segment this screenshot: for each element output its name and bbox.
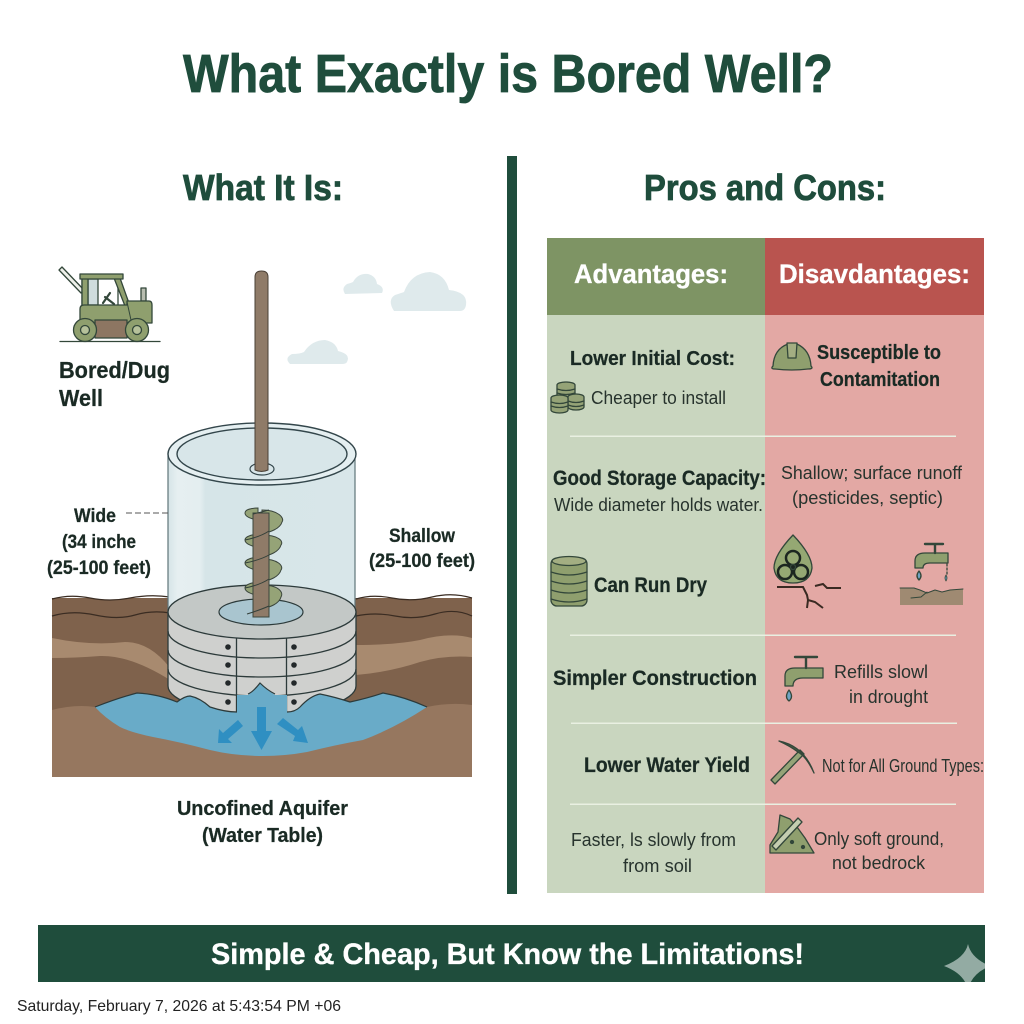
row 6 disadvantage: Only soft ground, bbox=[814, 829, 944, 849]
icon: tractor bbox=[59, 267, 160, 342]
label: bored/dug well: Well bbox=[59, 385, 103, 411]
icon: hard hat bbox=[772, 343, 812, 370]
row 5 advantage: Lower Water Yield bbox=[584, 754, 750, 777]
water outline bbox=[95, 683, 427, 712]
label: unconfined aquifer: Uncofined Aquifer bbox=[177, 798, 348, 820]
label: unconfined aquifer: (Water Table) bbox=[202, 825, 323, 847]
right heading: Pros and Cons: bbox=[644, 167, 886, 208]
wide dashed leader bbox=[126, 512, 168, 514]
row 3 advantage: Can Run Dry bbox=[594, 574, 707, 597]
timestamp: Saturday, February 7, 2026 at 5:43:54 PM +06 bbox=[17, 998, 341, 1015]
auger bbox=[245, 508, 283, 617]
footer banner: Simple & Cheap, But Know the Limitations! bbox=[211, 938, 804, 971]
clouds bbox=[287, 272, 466, 364]
title: What Exactly is Bored Well? bbox=[183, 44, 833, 104]
disadvantages header bbox=[765, 238, 984, 315]
flow arrows bbox=[218, 707, 308, 750]
row 2 disadvantage bbox=[781, 463, 963, 508]
label: wide: (25-100 feet) bbox=[47, 558, 151, 579]
soil cross-section bbox=[52, 585, 472, 777]
label: bored/dug well: Bored/Dug bbox=[59, 357, 170, 383]
row 1 disadvantage bbox=[772, 342, 941, 391]
label: bored/dug well bbox=[59, 357, 170, 411]
advantages column background bbox=[547, 315, 765, 893]
footer banner bbox=[38, 925, 985, 982]
icon: coins bbox=[551, 382, 584, 413]
label: shallow bbox=[369, 526, 475, 572]
row 3 advantage bbox=[551, 556, 707, 606]
row 2 advantage bbox=[553, 467, 766, 515]
row 2 disadvantage: (pesticides, septic) bbox=[792, 488, 943, 508]
row 2 disadvantage: Shallow; surface runoff bbox=[781, 463, 963, 483]
row 1 advantage bbox=[551, 348, 735, 413]
row 1 advantage: Cheaper to install bbox=[591, 388, 726, 408]
panel: pros and cons table bbox=[547, 238, 984, 893]
row 1 disadvantage: Contamitation bbox=[820, 369, 940, 391]
row 4 advantage: Simpler Construction bbox=[553, 667, 757, 690]
row 4 disadvantage: in drought bbox=[849, 687, 928, 707]
label: wide: Wide bbox=[74, 506, 116, 527]
aquifer water bbox=[95, 683, 427, 756]
label: wide bbox=[47, 506, 151, 579]
label: shallow: (25-100 feet) bbox=[369, 551, 475, 572]
icon: cracked ground bbox=[777, 584, 841, 608]
icon: rock and drill bbox=[770, 815, 814, 853]
row 4 disadvantage bbox=[785, 657, 928, 707]
row 6 advantage: Faster, ls slowly from bbox=[571, 830, 736, 850]
icon: pickaxe bbox=[771, 741, 814, 784]
row 6 advantage bbox=[571, 830, 736, 876]
row 1 advantage: Lower Initial Cost: bbox=[570, 348, 735, 370]
advantages header: Advantages: bbox=[574, 259, 728, 289]
advantages header bbox=[547, 238, 765, 315]
row 3 icons: biohazard and cracked ground bbox=[774, 535, 963, 608]
icon: faucet bbox=[785, 657, 823, 701]
row 5 disadvantage: Not for All Ground Types: bbox=[822, 756, 984, 776]
row 6 disadvantage: not bedrock bbox=[832, 853, 926, 873]
disadvantages header: Disavdantages: bbox=[779, 259, 970, 289]
well casing and glass cylinder bbox=[168, 423, 356, 714]
drill rod bbox=[250, 271, 274, 475]
icon: barrel bbox=[551, 556, 587, 606]
left heading: What It Is: bbox=[183, 167, 343, 208]
row 6 disadvantage bbox=[770, 815, 944, 873]
row 5 disadvantage bbox=[771, 741, 984, 784]
center divider bbox=[507, 156, 517, 894]
row 4 disadvantage: Refills slowl bbox=[834, 662, 928, 682]
icon: biohazard drop bbox=[774, 535, 812, 583]
label: shallow: Shallow bbox=[389, 526, 455, 547]
row 2 advantage: Good Storage Capacity: bbox=[553, 467, 766, 490]
row 6 advantage: from soil bbox=[623, 856, 692, 876]
icon: dripping faucet over soil bbox=[900, 544, 963, 605]
panel: bored well diagram bbox=[47, 267, 475, 847]
disadvantages column background bbox=[765, 315, 984, 893]
icon: sparkle bbox=[944, 944, 985, 982]
row 2 advantage: Wide diameter holds water. bbox=[554, 495, 763, 515]
row 1 disadvantage: Susceptible to bbox=[817, 342, 941, 364]
label: wide: (34 inche bbox=[62, 532, 136, 553]
label: unconfined aquifer bbox=[177, 798, 348, 847]
